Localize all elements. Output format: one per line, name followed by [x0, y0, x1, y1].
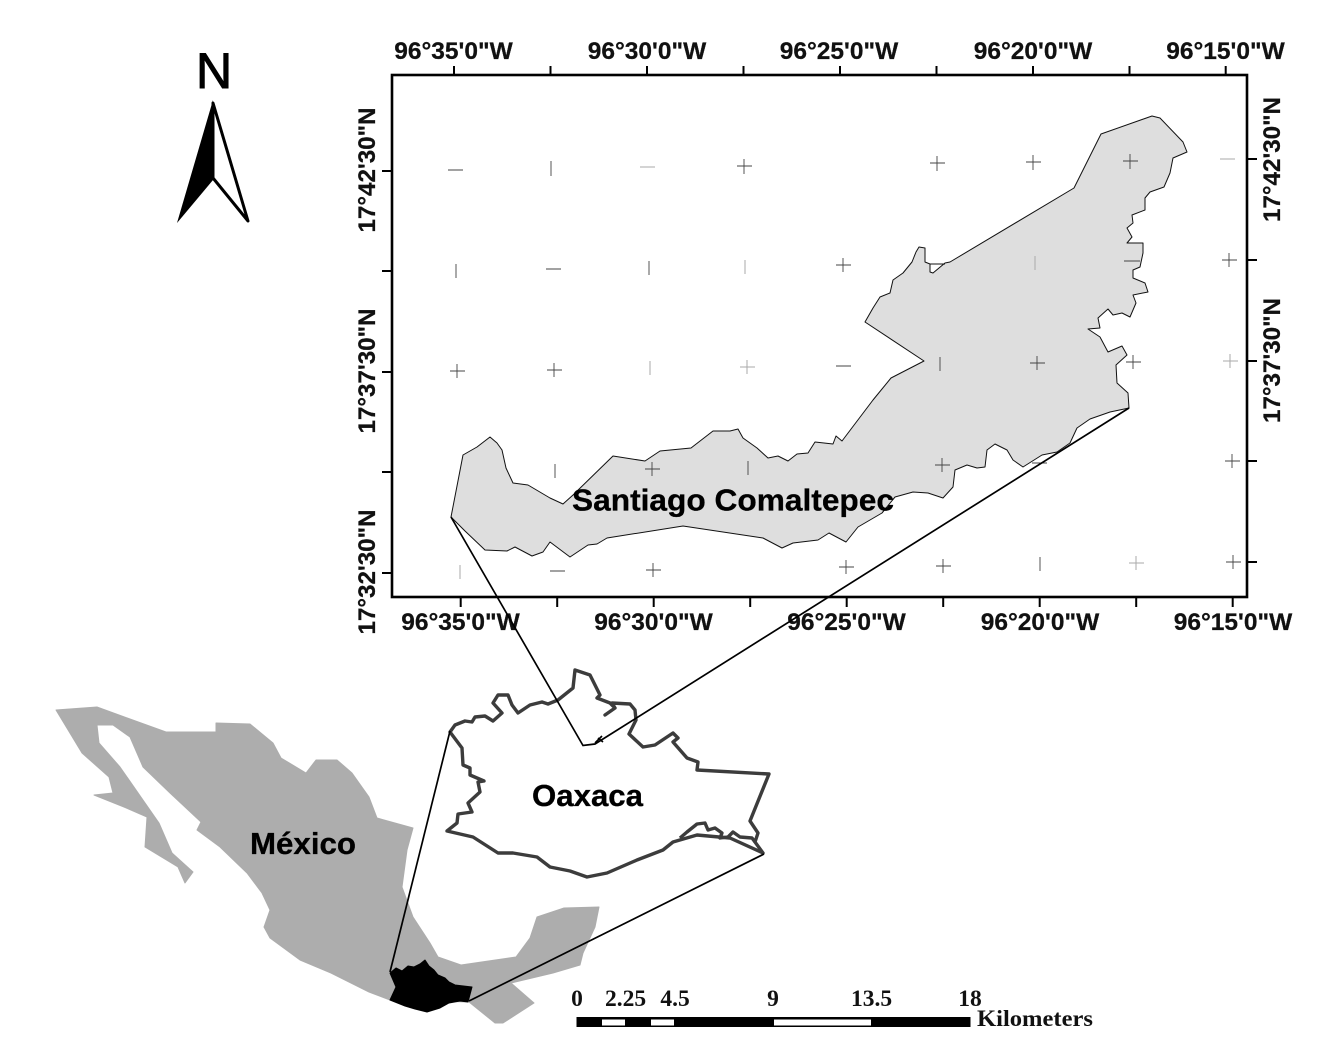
gap line on the northern boundary: [930, 263, 945, 265]
municipality name: Santiago Comaltepec: [572, 482, 894, 518]
state name: Oaxaca: [532, 778, 644, 813]
left latitude labels: [354, 108, 381, 634]
distance labels: 9: [767, 986, 779, 1012]
distance labels: 0: [571, 986, 583, 1012]
graticule crosses: [448, 154, 1241, 577]
unit label: Kilometers: [977, 1006, 1093, 1032]
north letter: N: [196, 43, 232, 99]
bottom longitude labels: 96°15'0"W: [1174, 609, 1293, 636]
faint graticule crosses: [460, 159, 1238, 579]
municipality polygon: [451, 116, 1187, 557]
top longitude labels: [394, 38, 1286, 65]
distance labels: 2.25: [605, 986, 646, 1012]
left latitude labels: 17°32'30"N: [354, 510, 381, 634]
coastal lagoons: [680, 823, 755, 842]
bottom longitude labels: 96°25'0"W: [787, 609, 907, 636]
distance labels: 13.5: [851, 986, 892, 1012]
Oaxaca state outline: [447, 670, 769, 877]
top longitude labels: 96°25'0"W: [780, 38, 899, 65]
state border: [447, 670, 769, 877]
arrow glyph: [177, 100, 248, 223]
top longitude labels: 96°35'0"W: [394, 38, 514, 65]
right latitude labels: 17°37'30"N: [1259, 298, 1286, 423]
top longitude labels: 96°15'0"W: [1166, 38, 1286, 65]
north arrow: [177, 43, 248, 223]
inset map: Santiago Comaltepec: [354, 38, 1293, 636]
country polygon: [56, 707, 599, 1023]
top longitude labels: 96°20'0"W: [974, 38, 1093, 65]
bar: [576, 1017, 970, 1027]
bottom longitude labels: 96°35'0"W: [401, 609, 521, 636]
scale bar: [571, 986, 1093, 1032]
bottom longitude labels: [401, 609, 1293, 636]
Oaxaca highlight: [390, 960, 472, 1012]
distance labels: [571, 986, 982, 1012]
right latitude labels: [1259, 97, 1286, 423]
map frame: [392, 75, 1247, 597]
zoom connector lines: [390, 408, 1129, 1001]
bottom longitude labels: 96°30'0"W: [594, 609, 714, 636]
map of Mexico: [56, 707, 599, 1023]
right latitude labels: 17°42'30"N: [1259, 97, 1286, 222]
frame ticks: [382, 66, 1257, 607]
top longitude labels: 96°30'0"W: [588, 38, 707, 65]
distance labels: 18: [958, 986, 982, 1012]
country name: México: [250, 826, 356, 861]
left latitude labels: 17°37'30"N: [354, 308, 381, 434]
left latitude labels: 17°42'30"N: [354, 108, 381, 232]
bottom longitude labels: 96°20'0"W: [981, 609, 1100, 636]
distance labels: 4.5: [660, 986, 690, 1012]
